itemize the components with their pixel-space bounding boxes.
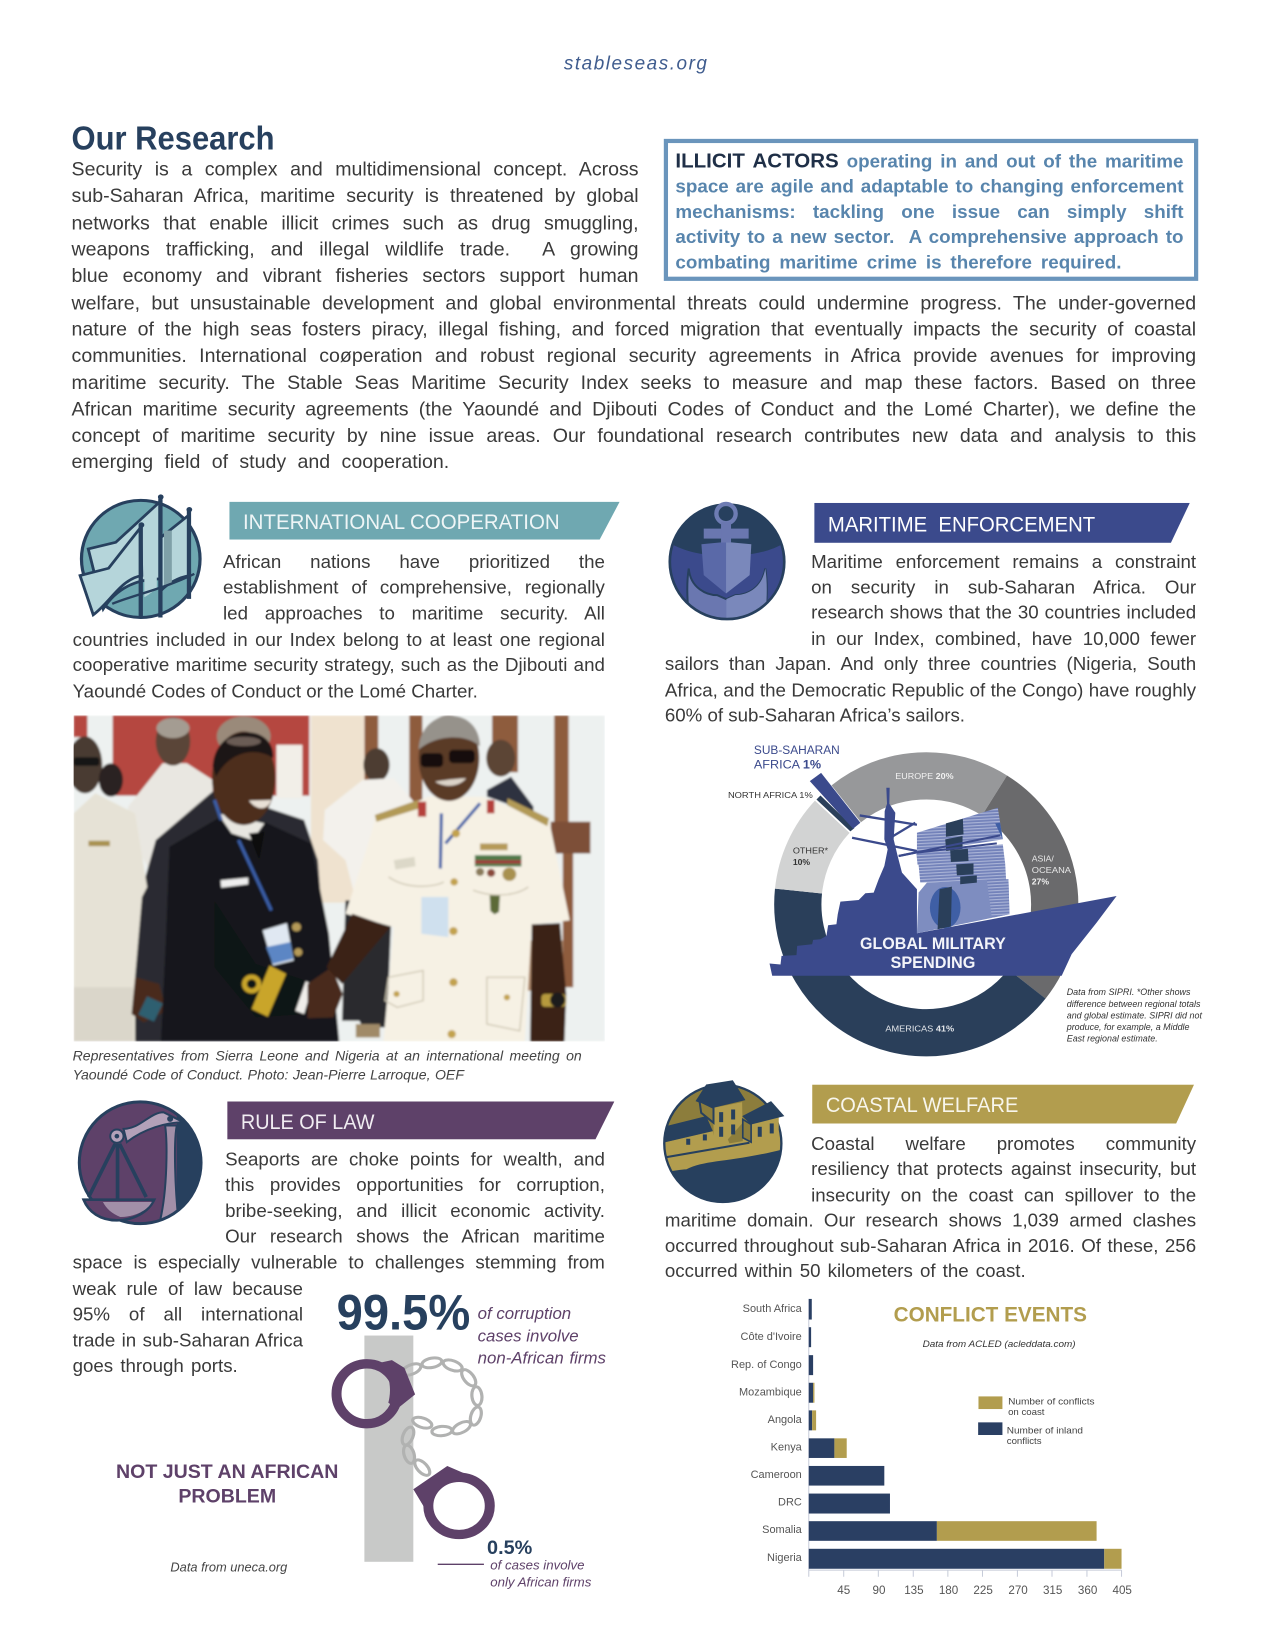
axis numbers: 45 — [837, 1584, 850, 1597]
source note: SIPRI — [1066, 986, 1202, 1044]
heading: not just an African problem: PROBLEM — [178, 1484, 276, 1506]
text block: international cooperation — [73, 551, 605, 701]
text block: maritime enforcement: on security in sub-Saharan Africa. Our — [811, 577, 1196, 598]
chart labels: AMERICAS 41% — [885, 1024, 954, 1034]
source note: uneca: Data from uneca.org — [170, 1560, 287, 1575]
chart labels: SPENDING — [890, 953, 975, 972]
text block: rule of law: goes through ports. — [73, 1355, 238, 1376]
text block: introduction: welfare, but unsustainable development and global environmental threats could undermine progress. The under-governed — [72, 291, 1196, 313]
banner: international cooperation: INTERNATIONAL COOPERATION — [243, 511, 560, 534]
icon: ships sails — [78, 494, 202, 619]
country labels: South Africa — [743, 1304, 803, 1316]
country labels: Rep. of Congo — [731, 1359, 802, 1371]
main right officer — [345, 796, 570, 1041]
callout: illicit actors: activity to a new sector. A comprehensive approach to — [675, 226, 1184, 247]
text block: introduction: blue economy and vibrant fisheries sectors support human — [72, 264, 639, 287]
ship — [769, 788, 1116, 976]
text block: coastal welfare: insecurity on the coast can spillover to the — [811, 1184, 1196, 1205]
stacks of money — [898, 808, 1009, 933]
coastal bars — [812, 1383, 1122, 1569]
text block: introduction: African maritime security agreements (the Yaoundé and Djibouti Codes of Conduct and the Lomé Charter), we define the — [72, 398, 1196, 420]
legend — [978, 1397, 1095, 1447]
text block: rule of law: Our research shows the African maritime — [225, 1226, 605, 1247]
text block: introduction: concept of maritime security by nine issue areas. Our foundational research contributes new data and analysis to this — [72, 424, 1196, 446]
banner: maritime enforcement: MARITIME ENFORCEMENT — [828, 513, 1095, 536]
source note: ACLED: Data from ACLED (acleddata.com) — [923, 1339, 1076, 1350]
country labels: DRC — [778, 1497, 802, 1509]
legend: on coast — [1008, 1407, 1045, 1418]
chart labels: NORTH AFRICA 1% — [728, 790, 813, 800]
stat caption: only African firms: only African firms — [490, 1575, 591, 1590]
banner: maritime enforcement — [814, 502, 1190, 543]
text block: rule of law: this provides opportunities for corruption, — [225, 1174, 605, 1195]
text block: introduction: nature of the high seas fosters piracy, illegal fishing, and forced migration that eventually impacts the security of coastal — [72, 318, 1196, 340]
axis numbers: 180 — [939, 1584, 959, 1597]
back people — [128, 763, 213, 880]
banner: coastal welfare — [812, 1084, 1194, 1124]
main left officer — [161, 818, 339, 1041]
left man in white — [74, 793, 147, 1041]
country labels: Côte d'Ivoire — [741, 1331, 802, 1343]
photo caption: Yaoundé Code of Conduct. Photo: Jean-Pierre Larroque, OEF — [73, 1067, 464, 1082]
text block: rule of law: Seaports are choke points for wealth, and — [225, 1148, 605, 1169]
heading: not just an African problem: NOT JUST AN AFRICAN — [116, 1460, 338, 1482]
segment: Other — [798, 817, 832, 891]
stat: 0.5 percent: 0.5% — [487, 1538, 532, 1559]
chart labels: 27% — [1032, 877, 1049, 887]
website address: stableseas.org — [564, 53, 707, 74]
callout: illicit actors: mechanisms: tackling one issue can simply shift — [675, 201, 1184, 222]
text block: introduction: emerging field of study and cooperation. — [72, 451, 449, 473]
axis numbers — [837, 1584, 1132, 1597]
text block: introduction: sub-Saharan Africa, maritime security is threatened by global — [72, 185, 639, 207]
chart labels: AFRICA 1% — [754, 759, 822, 772]
text block: international cooperation: Yaoundé Codes of Conduct or the Lomé Charter. — [73, 680, 478, 701]
chart title: CONFLICT EVENTS — [894, 1303, 1087, 1327]
text block: international cooperation: establishment of comprehensive, regionally — [223, 577, 605, 598]
chart labels: OCEANA — [1032, 865, 1071, 875]
chart labels: GLOBAL MILITARY — [860, 934, 1006, 953]
text block: rule of law: 95% of all international — [73, 1304, 303, 1325]
text block: introduction — [72, 158, 1196, 473]
text block: coastal welfare — [665, 1133, 1196, 1282]
text block: rule of law — [72, 1148, 605, 1376]
chart labels: EUROPE 20% — [895, 771, 954, 781]
axis numbers: 135 — [904, 1584, 924, 1597]
stat caption: only African firms: of cases involve — [490, 1558, 585, 1573]
segment: North Africa — [816, 796, 854, 832]
segment: Europe — [846, 776, 994, 804]
inland bars — [809, 1299, 1104, 1569]
stat caption: non-African firms — [478, 1306, 606, 1367]
country labels — [731, 1304, 803, 1564]
country labels: Cameroon — [751, 1469, 802, 1481]
chart labels: OTHER* — [793, 846, 829, 856]
heading: not just an African problem — [116, 1460, 338, 1506]
stat caption: only African firms — [490, 1558, 591, 1590]
axis numbers: 405 — [1113, 1584, 1132, 1597]
text block: maritime enforcement: Africa, and the Democratic Republic of the Congo) have roughly — [665, 679, 1196, 700]
source note: SIPRI: Data from SIPRI. *Other shows — [1067, 986, 1190, 997]
text block: introduction: communities. International coøperation and robust regional security agreements in Africa provide avenues for improving — [72, 344, 1196, 366]
text block: maritime enforcement: in our Index, combined, have 10,000 fewer — [811, 628, 1196, 649]
chart labels: 10% — [793, 857, 810, 867]
source note: SIPRI: difference between regional totals — [1067, 998, 1200, 1009]
legend: Number of inland — [1007, 1426, 1083, 1437]
callout: illicit actors: space are agile and adaptable to changing enforcement — [675, 176, 1184, 197]
segment: Asia/Oceana — [994, 796, 1054, 984]
banner: rule of law — [227, 1102, 614, 1140]
text block: rule of law: space is especially vulnerable to challenges stemming from — [73, 1252, 605, 1273]
country labels: Mozambique — [739, 1387, 802, 1399]
text block: coastal welfare: occurred throughout sub-Saharan Africa in 2016. Of these, 256 — [665, 1235, 1196, 1256]
banner: international cooperation — [229, 502, 620, 540]
callout: illicit actors: combating maritime crime is therefore required. — [675, 251, 1121, 272]
chart: conflict events bar chart — [731, 1298, 1132, 1597]
text block: introduction: networks that enable illicit crimes such as drug smuggling, — [72, 211, 639, 233]
axis numbers: 315 — [1043, 1584, 1062, 1597]
country labels: Angola — [768, 1414, 803, 1426]
banner: coastal welfare: COASTAL WELFARE — [826, 1094, 1018, 1117]
text block: international cooperation: cooperative maritime security strategy, such as the Djibouti and — [73, 655, 605, 676]
icon: anchor — [668, 502, 786, 620]
source note: SIPRI: and global estimate. SIPRI did not — [1067, 1010, 1202, 1020]
source note: SIPRI: East regional estimate. — [1067, 1033, 1158, 1044]
text block: coastal welfare: occurred within 50 kilometers of the coast. — [665, 1261, 1026, 1282]
graphic: handcuffs over grey bar — [332, 1336, 495, 1562]
segment: Americas — [798, 891, 1027, 1033]
text block: maritime enforcement: research shows that the 30 countries included — [811, 602, 1196, 623]
text block: rule of law: bribe-seeking, and illicit economic activity. — [225, 1200, 605, 1221]
chart labels: ASIA/ — [1032, 854, 1054, 864]
callout: illicit actors: ILLICIT ACTORS operating in and out of the maritime — [675, 149, 1184, 173]
country labels: Kenya — [771, 1442, 803, 1454]
photo: naval representatives shaking hands — [74, 715, 604, 1042]
text block: maritime enforcement — [665, 551, 1196, 726]
axis numbers: 225 — [973, 1584, 993, 1597]
text block: maritime enforcement: sailors than Japan. And only three countries (Nigeria, South — [665, 653, 1196, 675]
stat caption: non-African firms: of corruption — [478, 1306, 571, 1323]
text block: rule of law: weak rule of law because — [73, 1278, 303, 1299]
text block: maritime enforcement: Maritime enforcement remains a constraint — [811, 551, 1196, 572]
chart: global military spending donut with ship — [728, 744, 1116, 1056]
text block: international cooperation: led approaches to maritime security. All — [223, 603, 605, 624]
chart labels: SUB-SAHARAN — [754, 744, 840, 757]
stat caption: non-African firms: cases involve — [478, 1327, 579, 1345]
source note: SIPRI: produce, for example, a Middle — [1067, 1022, 1189, 1032]
segment: Sub-Saharan Africa — [810, 773, 860, 829]
text block: maritime enforcement: 60% of sub-Saharan Africa’s sailors. — [665, 705, 965, 726]
text block: international cooperation: African nations have prioritized the — [223, 551, 605, 572]
callout: illicit actors — [664, 139, 1198, 281]
axis numbers: 270 — [1008, 1584, 1028, 1597]
text block: coastal welfare: maritime domain. Our research shows 1,039 armed clashes — [665, 1210, 1196, 1231]
leader line — [438, 1564, 484, 1565]
text block: international cooperation: countries included in our Index belong to at least one regional — [73, 629, 605, 650]
text block: rule of law: trade in sub-Saharan Africa — [73, 1329, 303, 1351]
icon: scales of justice — [78, 1100, 203, 1226]
banner: rule of law: RULE OF LAW — [241, 1111, 375, 1134]
country labels: Somalia — [762, 1524, 803, 1536]
text block: introduction: Security is a complex and multidimensional concept. Across — [72, 158, 639, 180]
legend: Number of conflicts — [1008, 1397, 1095, 1408]
axis numbers: 90 — [873, 1584, 886, 1597]
photo caption — [73, 1048, 582, 1082]
stat caption: non-African firms: non-African firms — [478, 1349, 606, 1367]
text block: coastal welfare: resiliency that protects against insecurity, but — [811, 1159, 1196, 1180]
photo caption: Representatives from Sierra Leone and Nigeria at an international meeting on — [73, 1048, 582, 1063]
axes — [809, 1299, 1122, 1577]
text block: introduction: maritime security. The Stable Seas Maritime Security Index seeks to measure and map these factors. Based on three — [72, 371, 1196, 393]
icon: coastal buildings — [663, 1080, 784, 1204]
legend: conflicts — [1007, 1436, 1042, 1447]
axis numbers: 360 — [1078, 1584, 1098, 1597]
chart labels — [728, 744, 1071, 1034]
text block: introduction: weapons trafficking, and illegal wildlife trade. A growing — [72, 238, 639, 260]
country labels: Nigeria — [767, 1552, 803, 1564]
text block: coastal welfare: Coastal welfare promotes community — [811, 1133, 1196, 1154]
